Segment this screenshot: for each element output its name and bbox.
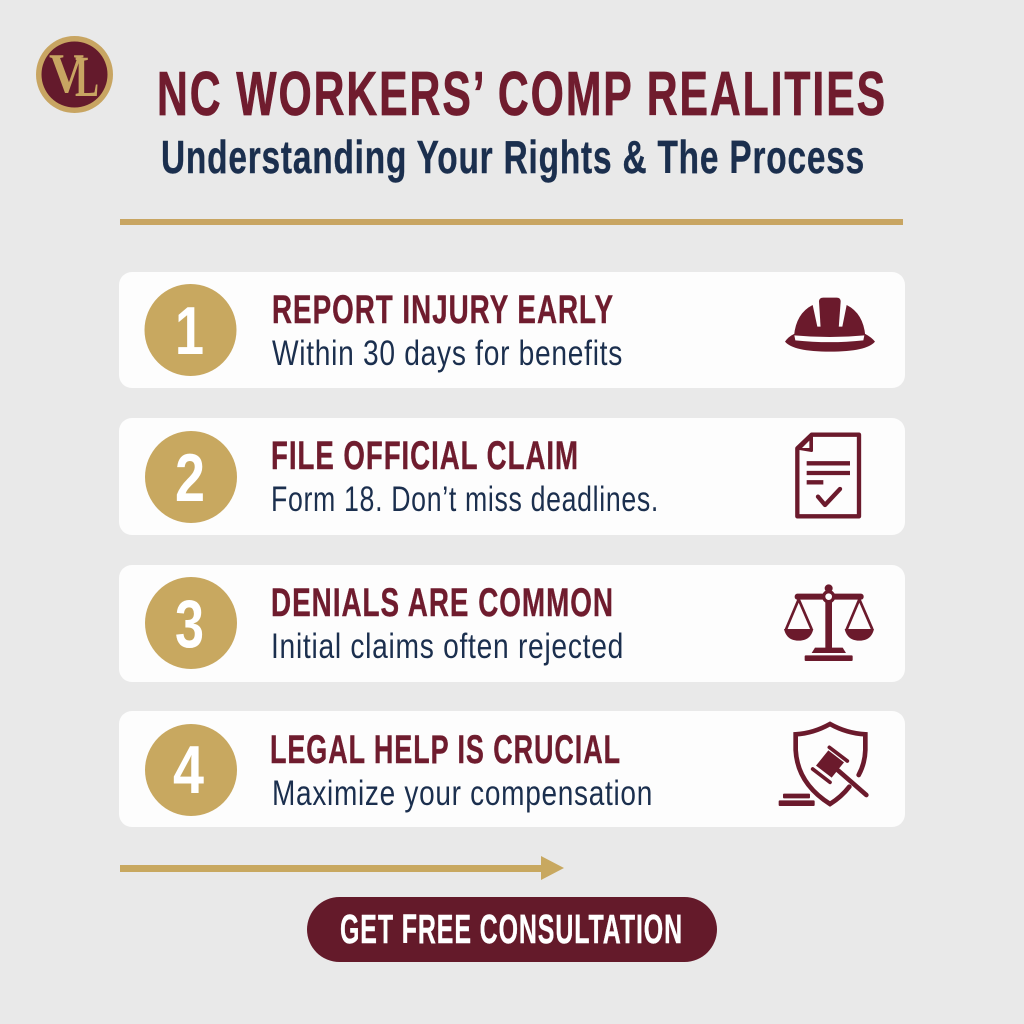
icon: scales of justice	[784, 584, 874, 661]
logo: VL monogram: V	[49, 43, 84, 105]
description 2: Form 18. Don’t miss deadlines.	[271, 480, 659, 519]
panel: step 4 legal help	[119, 711, 905, 827]
panel: step 1 report injury	[119, 272, 905, 388]
number badge 2	[145, 431, 237, 523]
button: get free consultation	[307, 897, 717, 962]
heading 2: FILE OFFICIAL CLAIM	[271, 434, 579, 478]
description 1: Within 30 days for benefits	[272, 334, 623, 373]
button: get free consultation: GET FREE CONSULTATION	[340, 906, 683, 952]
panel: step 2 file claim	[119, 418, 905, 535]
number badge 3	[145, 577, 237, 669]
number badge 4	[145, 724, 237, 816]
logo: VL monogram: L	[75, 44, 99, 109]
number badge 1: 1	[175, 293, 204, 369]
heading 4: LEGAL HELP IS CRUCIAL	[270, 728, 621, 772]
icon: shield with gavel	[779, 724, 866, 806]
number badge 4: 4	[173, 732, 204, 808]
icon: hard hat	[785, 298, 875, 352]
number badge 3: 3	[175, 586, 204, 662]
number badge 1	[144, 284, 236, 376]
description 3: Initial claims often rejected	[271, 627, 624, 666]
logo: VL monogram	[36, 36, 113, 113]
heading 3: DENIALS ARE COMMON	[271, 581, 614, 625]
icon: document with check	[797, 435, 859, 516]
arrow	[120, 856, 564, 880]
description 4: Maximize your compensation	[272, 774, 653, 813]
panel: step 3 denials	[119, 565, 905, 682]
heading 1: REPORT INJURY EARLY	[272, 288, 614, 332]
number badge 2: 2	[175, 440, 205, 516]
